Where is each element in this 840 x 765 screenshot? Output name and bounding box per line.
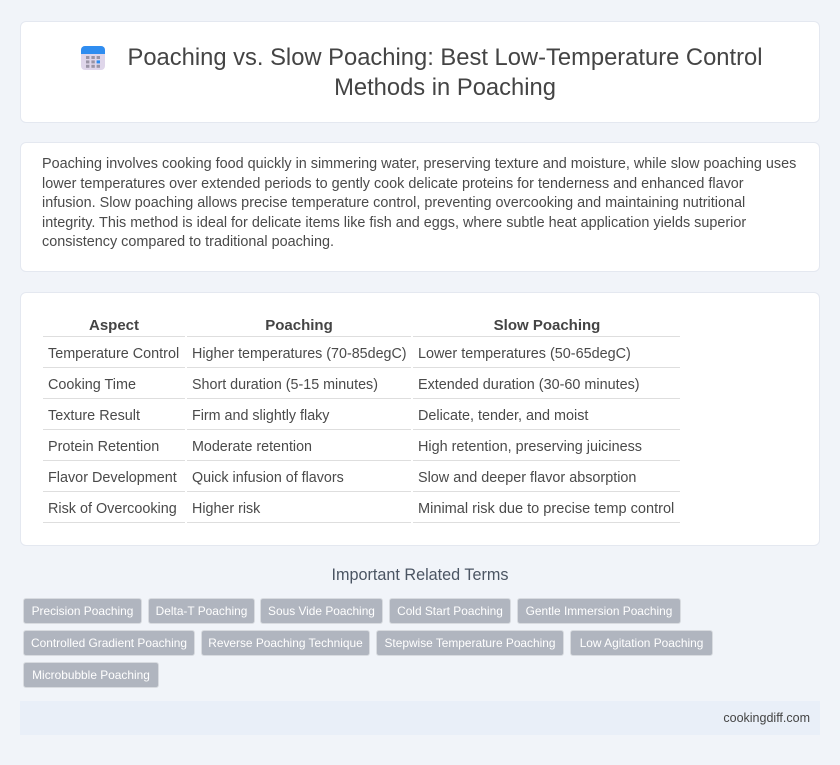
comparison table: Delicate, tender, and moist (418, 408, 588, 424)
related terms tags: Controlled Gradient Poaching (31, 636, 187, 650)
comparison table: High retention, preserving juiciness (418, 439, 642, 455)
comparison table: Firm and slightly flaky (192, 408, 329, 424)
panel: title card (20, 21, 820, 123)
summary text: infusion. Slow poaching allows precise temperature control, preventing overcooking and maintaining nutritional (42, 195, 745, 211)
icon: calendar (81, 46, 105, 70)
summary text: consistency compared to traditional poaching. (42, 234, 334, 250)
related terms tags: Precision Poaching (32, 604, 133, 618)
comparison table: Risk of Overcooking (48, 501, 177, 517)
related terms tags (23, 598, 713, 688)
related terms tags: Gentle Immersion Poaching (526, 604, 672, 618)
title (128, 44, 762, 100)
panel: comparison table card (20, 292, 820, 546)
comparison table: Poaching (265, 317, 333, 334)
comparison table: Quick infusion of flavors (192, 470, 344, 486)
related terms tags: Stepwise Temperature Poaching (384, 636, 555, 650)
comparison table: Slow Poaching (494, 317, 600, 334)
related terms tags: Low Agitation Poaching (580, 636, 703, 650)
comparison table: Moderate retention (192, 439, 312, 455)
comparison table: Temperature Control (48, 346, 179, 362)
comparison table: Aspect (89, 317, 139, 334)
comparison table: Lower temperatures (50-65degC) (418, 346, 631, 362)
comparison table: Cooking Time (48, 377, 136, 393)
comparison table: Extended duration (30-60 minutes) (418, 377, 640, 393)
summary text (42, 156, 796, 250)
summary text: integrity. This method is ideal for delicate items like fish and eggs, where subtle heat application yields superior (42, 215, 746, 231)
comparison table: Higher temperatures (70-85degC) (192, 346, 407, 362)
comparison table: Flavor Development (48, 470, 177, 486)
comparison table: Higher risk (192, 501, 260, 517)
related terms tags: Sous Vide Poaching (268, 604, 375, 618)
summary text: Poaching involves cooking food quickly in simmering water, preserving texture and moisture, while slow poaching uses (42, 156, 796, 172)
comparison table: Short duration (5-15 minutes) (192, 377, 378, 393)
comparison table: Slow and deeper flavor absorption (418, 470, 636, 486)
panel: summary card (20, 142, 820, 272)
footer source: cookingdiff.com (723, 711, 810, 725)
related terms tags: Microbubble Poaching (32, 668, 150, 682)
title: Methods in Poaching (334, 74, 556, 100)
related terms tags: Delta-T Poaching (156, 604, 247, 618)
related terms tags: Reverse Poaching Technique (208, 636, 363, 650)
comparison table (43, 317, 680, 523)
comparison table: Texture Result (48, 408, 140, 424)
summary text: lower temperatures over extended periods to gently cook delicate proteins for tenderness and enhanced flavor (42, 176, 744, 192)
footer bar (20, 701, 820, 735)
comparison table: Minimal risk due to precise temp control (418, 501, 674, 517)
title: Poaching vs. Slow Poaching: Best Low-Temperature Control (128, 44, 762, 71)
comparison table: Protein Retention (48, 439, 159, 455)
related terms tags: Cold Start Poaching (397, 604, 503, 618)
related terms heading: Important Related Terms (332, 566, 508, 584)
